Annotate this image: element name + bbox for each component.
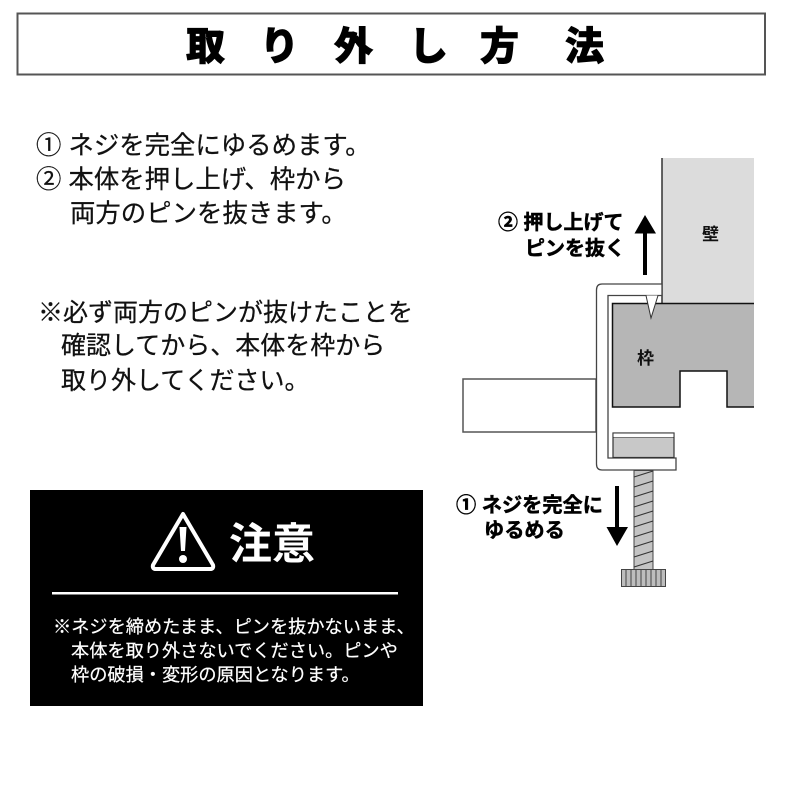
arrow: up: [634, 215, 656, 275]
note text: ※必ず両方のピンが抜けたことを: [38, 299, 413, 327]
caution heading: 注意: [229, 521, 315, 569]
caution text: ※ネジを締めたまま、ピンを抜かないまま、: [53, 617, 415, 637]
frame: [612, 304, 754, 407]
label: step 1: ゆるめる: [484, 520, 565, 542]
instructions text: ② 本体を押し上げ、枠から: [36, 166, 346, 194]
label: step 2: ② 押し上げて: [498, 211, 624, 234]
frame: 枠: [637, 349, 654, 368]
caution text: [53, 617, 415, 685]
label: step 2: ピンを抜く: [525, 237, 625, 260]
arrow: down: [606, 486, 628, 546]
note text: 確認してから、本体を枠から: [61, 332, 385, 360]
label: step 2: [498, 211, 625, 260]
label: step 1: [456, 494, 603, 542]
instructions text: [36, 132, 371, 228]
instructions text: 両方のピンを抜きます。: [70, 200, 347, 228]
diagram: [456, 158, 754, 586]
icon: warning triangle: [153, 514, 213, 569]
block: [613, 433, 674, 458]
title box: [18, 14, 765, 74]
pin: [646, 296, 658, 318]
instructions text: ① ネジを完全にゆるめます。: [36, 132, 371, 160]
knob: [622, 570, 666, 586]
panel: caution: [30, 490, 423, 706]
screw: [634, 470, 653, 570]
wall: 壁: [702, 225, 719, 244]
bracket: [596, 284, 676, 470]
note text: 取り外してください。: [61, 367, 310, 395]
handle: [463, 379, 596, 432]
wall: [662, 158, 754, 303]
caution text: 本体を取り外さないでください。ピンや: [71, 641, 398, 661]
label: step 1: ① ネジを完全に: [456, 494, 603, 517]
title: 取り外し方法: [186, 26, 604, 69]
note text: [38, 299, 413, 395]
caution text: 枠の破損・変形の原因となります。: [71, 665, 360, 685]
